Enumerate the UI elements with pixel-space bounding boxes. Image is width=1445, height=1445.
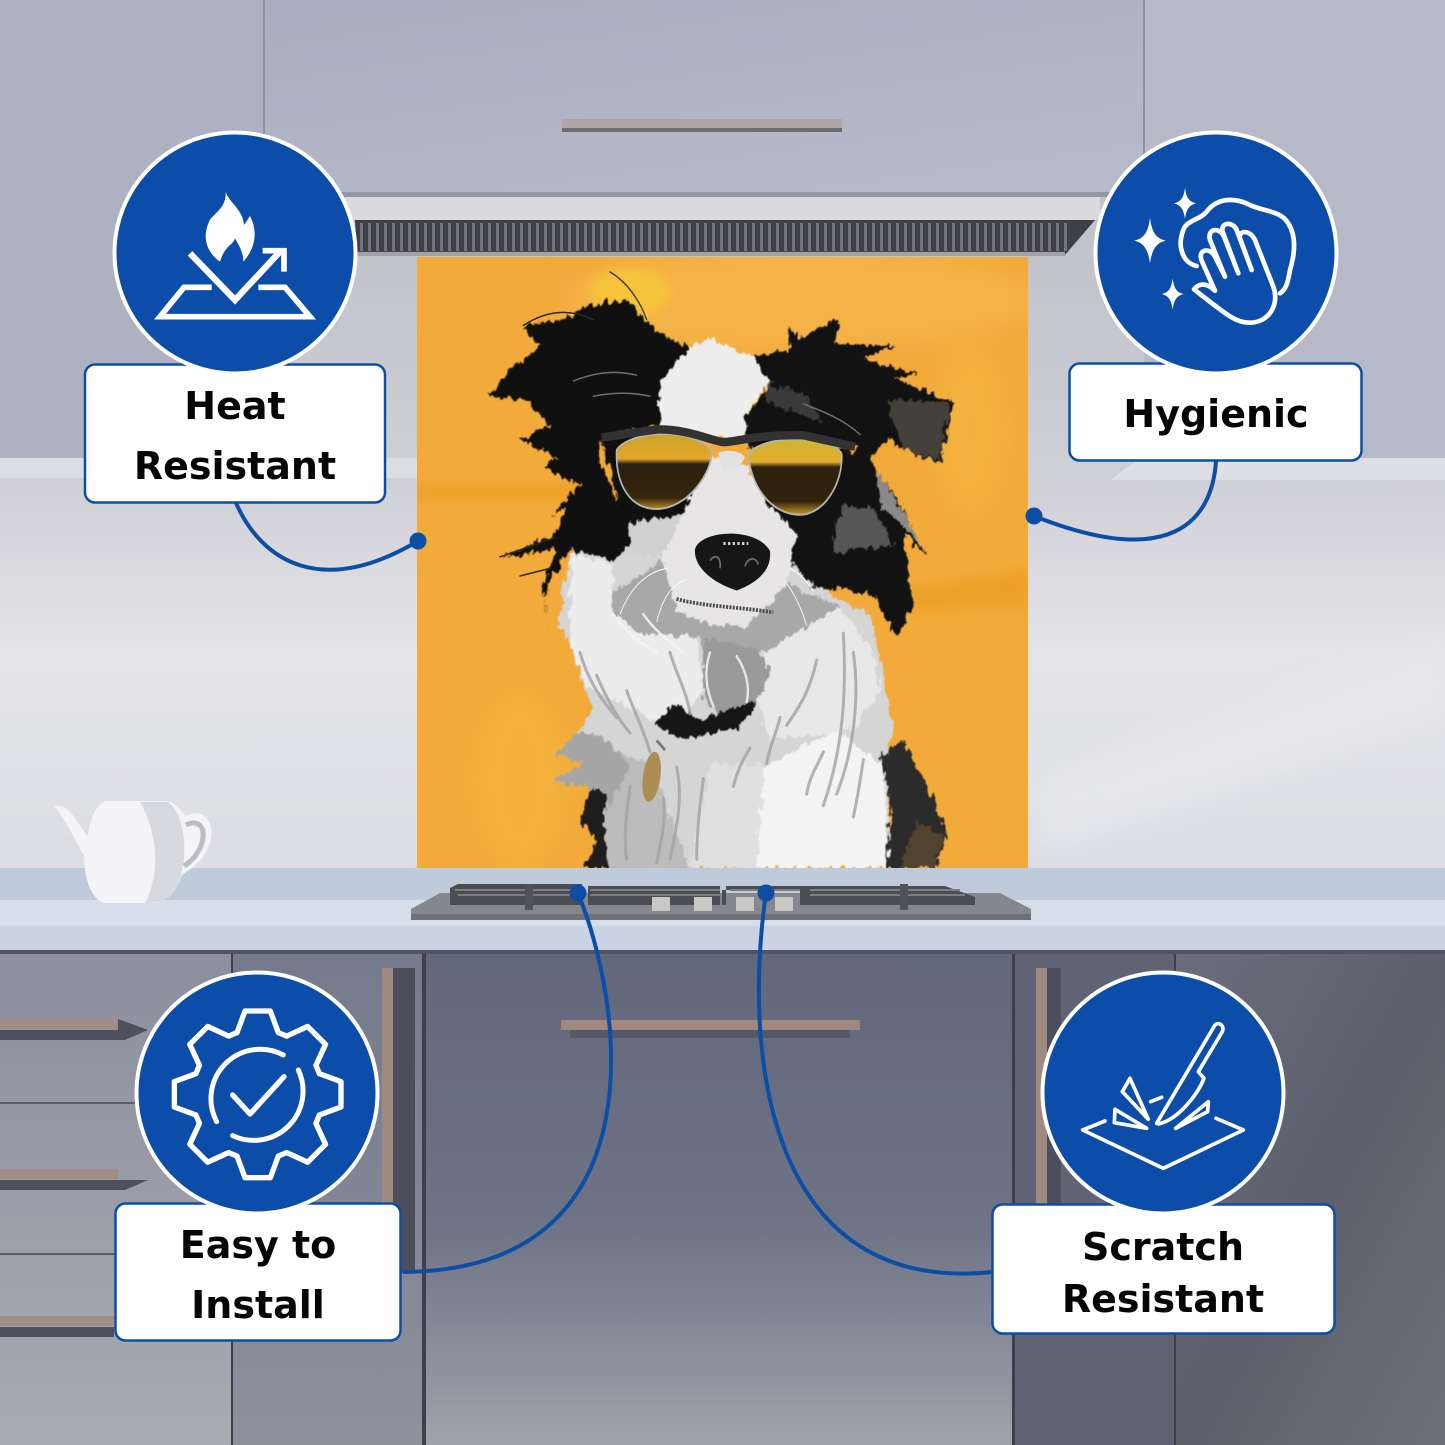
callout: scratch resistant [758,884,1334,1334]
dog tag [640,740,665,803]
label: easy to install: Easy to [180,1223,336,1267]
label box: easy to install [116,1204,400,1340]
black fur left of head [488,301,690,633]
callout: hygienic [1026,132,1362,539]
icon: hand wiping with cloth and sparkles [1134,188,1294,323]
mouth and whiskers [620,568,813,626]
black fill behind left lens [600,431,710,545]
collar [653,702,757,739]
label: heat resistant: Resistant [134,444,336,488]
kitchen background [0,0,1445,960]
icon: flame and reflected arrow on surface [160,192,310,317]
countertop [0,868,1445,954]
callout: heat resistant [85,132,426,570]
label box: heat resistant [85,364,385,502]
label box: hygienic [1070,364,1362,460]
callout: easy to install [116,884,611,1340]
connector: hygienic [1026,461,1216,539]
label: heat resistant: Heat [184,384,286,428]
connector: heat resistant [236,503,426,570]
badge: heat resistant [114,132,356,374]
icon: gear with check mark [174,1011,341,1178]
lower cabinets [0,954,1445,1445]
label: easy to install: Install [191,1283,325,1327]
label: hygienic: Hygienic [1123,392,1309,436]
badge: hygienic [1096,132,1336,374]
black fur right of head [743,318,953,637]
label: scratch resistant: Resistant [1062,1277,1264,1321]
badge: scratch resistant [1042,972,1284,1214]
dog fur [488,301,953,869]
nose [695,534,770,591]
fur strands [500,272,863,863]
centre chest tuft [703,637,770,718]
grey cheeks [603,561,837,652]
white ruff right [757,607,880,740]
orange painted background [417,250,1040,870]
sunglasses [602,429,855,515]
illustration: border collie wearing sunglasses [488,272,953,869]
label: scratch resistant: Scratch [1082,1225,1244,1269]
chest and neck fur [553,519,893,869]
connector: easy to install [403,884,611,1272]
white ruff left [570,553,703,721]
white blaze [660,339,770,438]
connector: scratch resistant [758,884,992,1274]
white patch below left lens [627,512,684,546]
teapot [54,801,211,903]
icon: knife scratching surface [1083,1024,1243,1168]
label box: scratch resistant [992,1204,1334,1334]
black fill behind right lens [747,434,850,545]
cooktop [411,884,1031,920]
panel: glass splashback with dog artwork [417,250,1040,870]
badge: easy to install [136,972,378,1214]
white muzzle [662,454,797,626]
